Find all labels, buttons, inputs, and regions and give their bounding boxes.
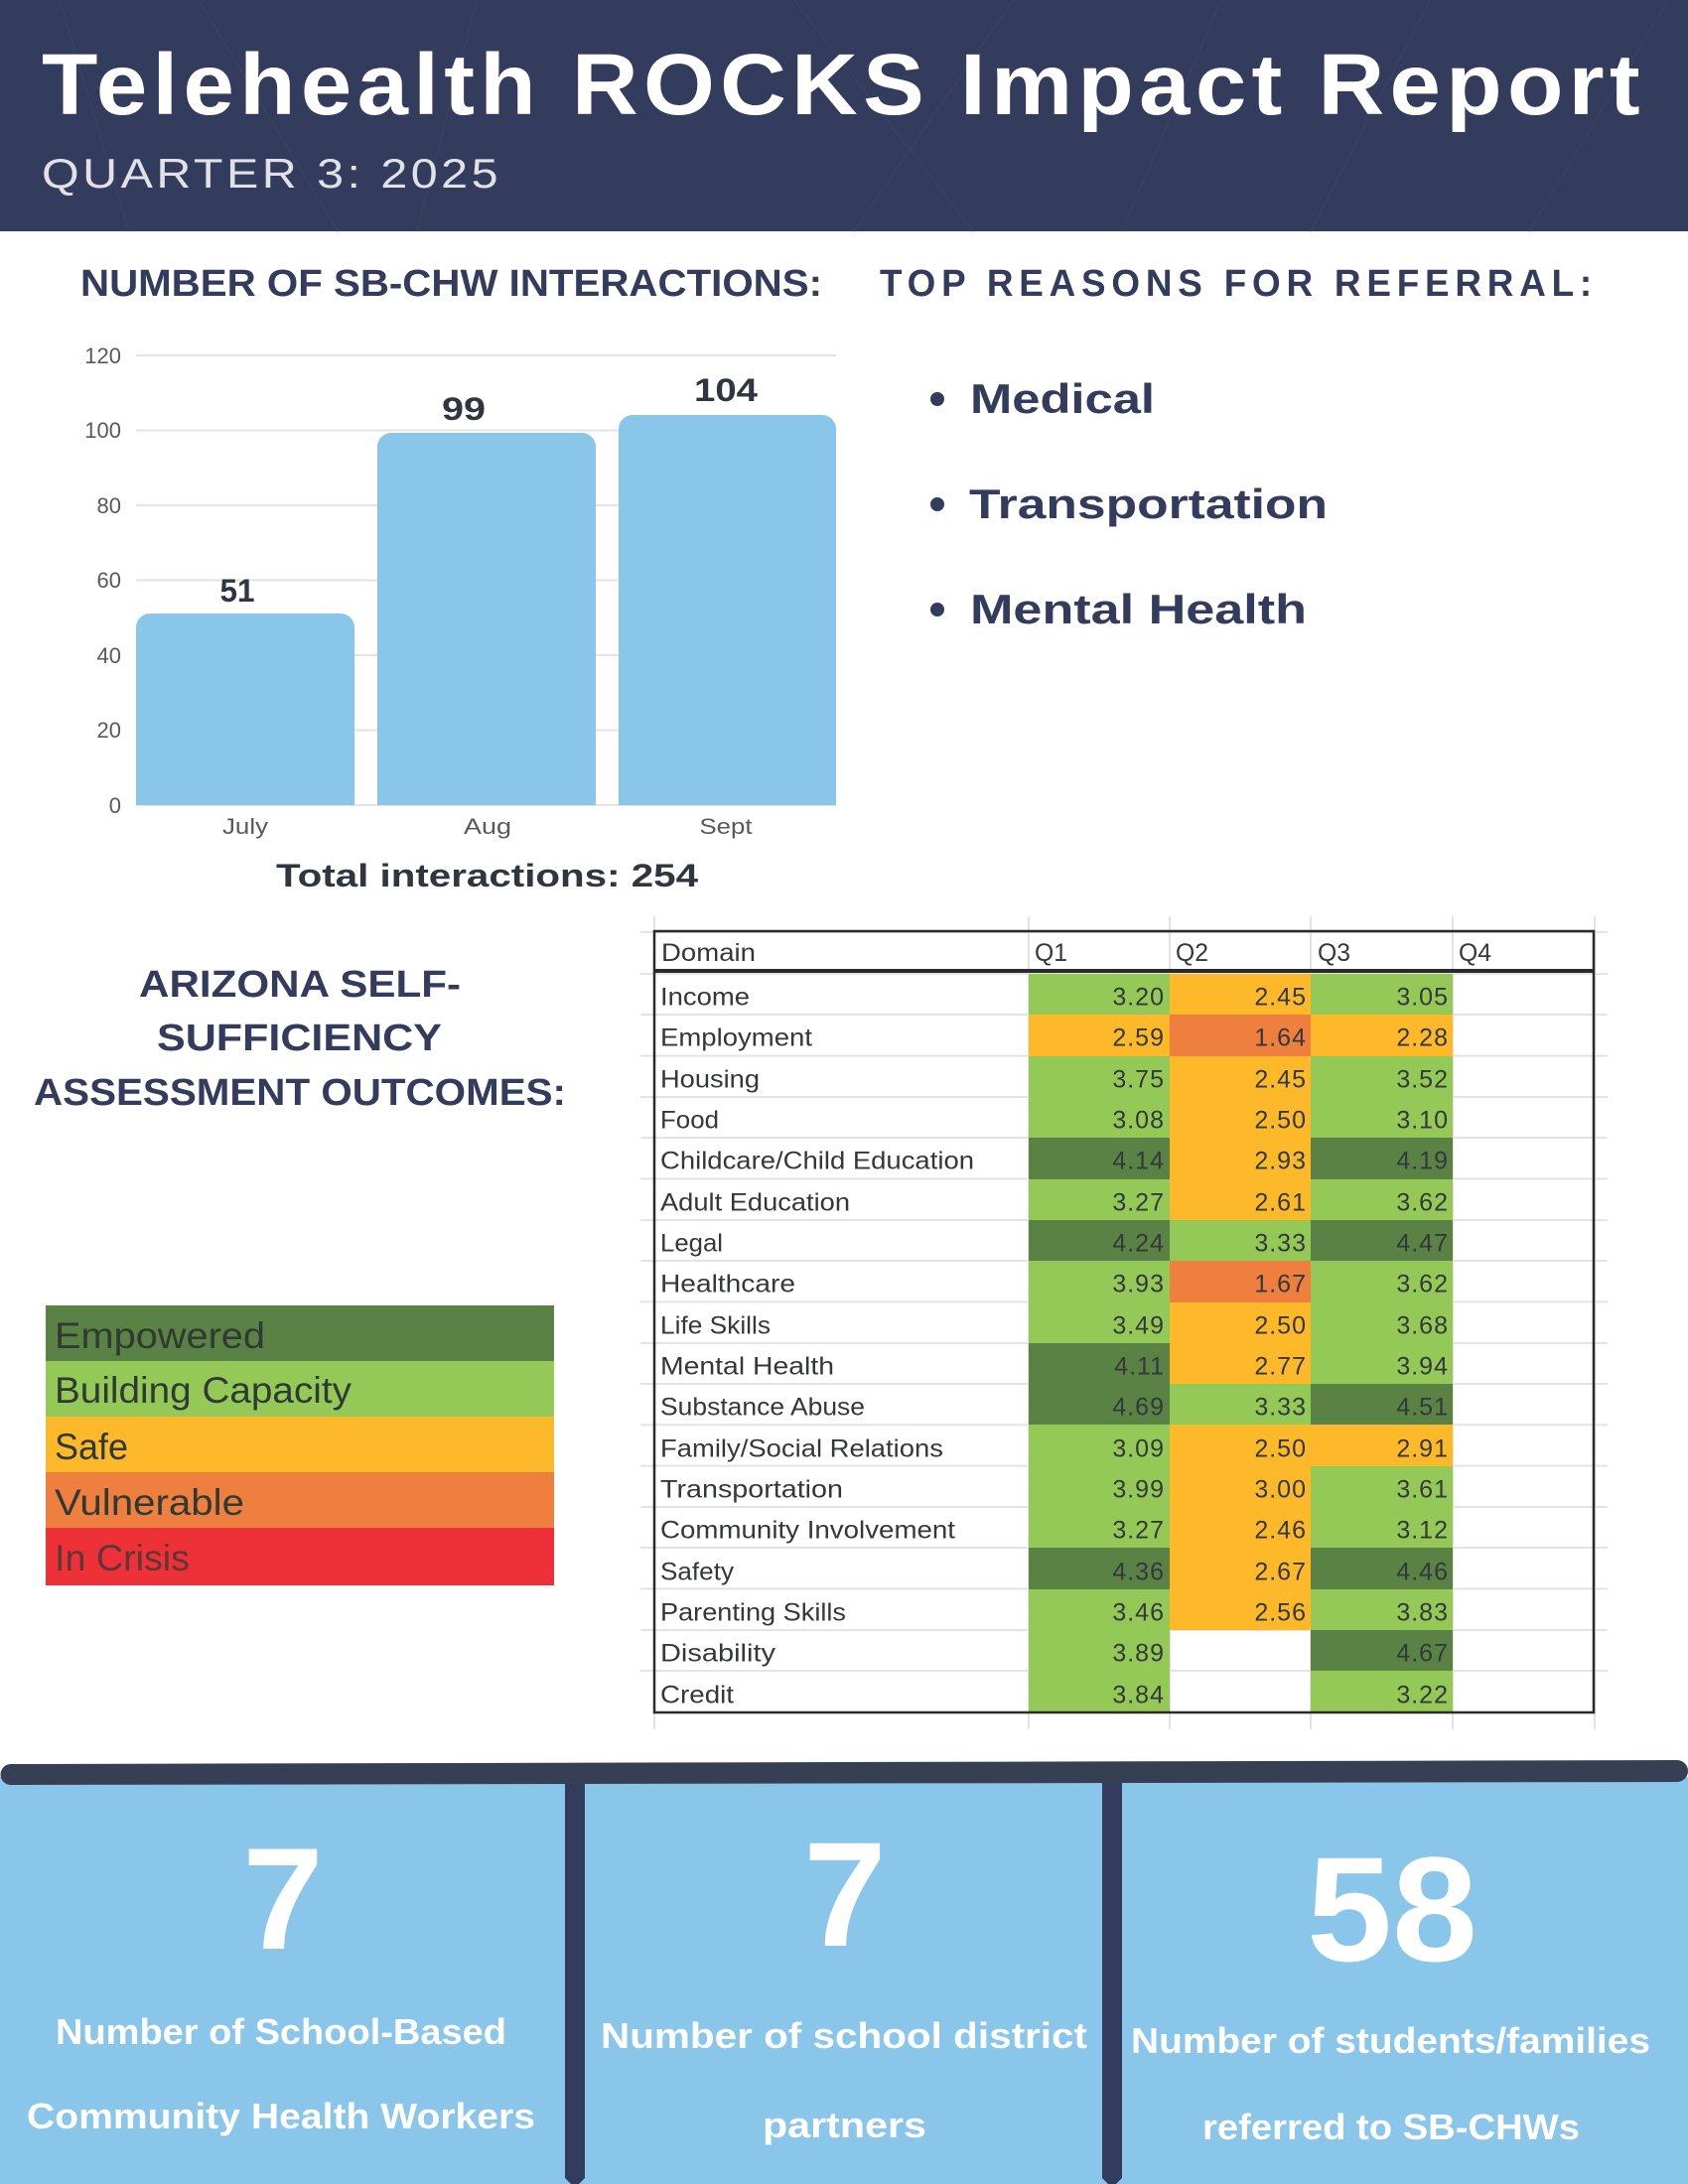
table domain labels: Adult Education [660, 1189, 850, 1217]
x axis labels: Sept [699, 814, 753, 839]
table domain labels: Healthcare [660, 1271, 795, 1298]
heading: Arizona self-sufficiency assessment outcomes [34, 964, 566, 1114]
Q1 scores: 3.89 [1112, 1640, 1165, 1668]
Q2 scores: 3.33 [1254, 1394, 1307, 1422]
legend: outcome levels: In Crisis [55, 1538, 190, 1578]
Q3 scores: 4.19 [1396, 1148, 1449, 1175]
table domain labels [660, 983, 974, 1709]
y axis labels: 20 [97, 718, 121, 743]
Q3 scores: 4.46 [1396, 1559, 1449, 1586]
bar: Sept [619, 415, 836, 805]
Q3 scores: 3.94 [1396, 1352, 1449, 1380]
bar values [220, 372, 758, 609]
header banner [0, 0, 1688, 231]
Q2 scores: 2.56 [1254, 1598, 1307, 1626]
legend: outcome levels: Safe [55, 1427, 128, 1467]
heading: Arizona self-sufficiency assessment outcomes: ASSESSMENT OUTCOMES: [34, 1072, 566, 1114]
x axis labels: Aug [464, 814, 511, 839]
panel: school-based community health workers: 7 [242, 1818, 324, 1979]
table domain labels: Substance Abuse [660, 1394, 865, 1422]
heading: number of interactions: NUMBER OF SB-CHW INTERACTIONS: [80, 263, 822, 305]
Q1 scores: 4.11 [1114, 1352, 1165, 1380]
panel: school district partners [601, 1811, 1087, 2145]
heat map cells [1029, 974, 1453, 1712]
divider: left [565, 1777, 585, 2184]
Q1 scores: 3.75 [1112, 1066, 1165, 1094]
heading: Arizona self-sufficiency assessment outcomes: ARIZONA SELF- [139, 964, 461, 1006]
Q1 scores: 3.20 [1112, 983, 1165, 1011]
table domain labels: Life Skills [660, 1312, 771, 1340]
Q1 scores: 3.99 [1112, 1475, 1165, 1503]
Q1 scores: 4.69 [1112, 1394, 1165, 1422]
panel: school-based community health workers: Community Health Workers [27, 2096, 535, 2136]
Q2 scores: 2.50 [1254, 1435, 1307, 1463]
Q1 scores [1112, 983, 1165, 1709]
Q3 scores: 4.67 [1396, 1640, 1449, 1668]
Q2 scores: 1.64 [1254, 1024, 1307, 1052]
heading: top reasons for referral: TOP REASONS FOR REFERRAL: [880, 263, 1598, 305]
panel: students and families referred: referred to SB-CHWs [1202, 2107, 1580, 2147]
table borders [654, 931, 1594, 1712]
heading: Arizona self-sufficiency assessment outcomes: SUFFICIENCY [157, 1018, 442, 1059]
Q1 scores: 3.08 [1112, 1106, 1165, 1134]
Q3 scores: 3.62 [1396, 1189, 1449, 1217]
legend: outcome levels: Empowered [55, 1315, 265, 1356]
Q3 scores: 4.51 [1396, 1394, 1449, 1422]
horizontal rule [1, 1760, 1688, 1785]
table domain labels: Employment [660, 1024, 812, 1052]
Q2 scores [1254, 983, 1307, 1626]
Q1 scores: 3.93 [1112, 1271, 1165, 1298]
y axis labels: 120 [84, 343, 121, 368]
Q1 scores: 3.27 [1112, 1189, 1165, 1217]
table domain labels: Parenting Skills [660, 1598, 846, 1626]
Q2 scores: 2.50 [1254, 1106, 1307, 1134]
panel: school district partners: partners [763, 2105, 926, 2145]
Q2 scores: 2.46 [1254, 1517, 1307, 1545]
Q3 scores: 3.05 [1396, 983, 1449, 1011]
panel: school-based community health workers: Number of School-Based [56, 2011, 506, 2052]
Q3 scores [1396, 983, 1449, 1709]
bar values: 51 [220, 573, 254, 609]
Q3 scores: 3.62 [1396, 1271, 1449, 1298]
list: top reasons: Transportation [969, 480, 1328, 527]
Q1 scores: 3.46 [1112, 1598, 1165, 1626]
Q2 scores: 2.50 [1254, 1312, 1307, 1340]
table domain labels: Disability [660, 1640, 776, 1668]
footer stats band [0, 1760, 1688, 2184]
table domain labels: Safety [660, 1559, 735, 1586]
panel: students and families referred: Number of students/families [1131, 2020, 1650, 2061]
y axis labels [84, 343, 121, 818]
panel: school district partners: 7 [803, 1811, 887, 1978]
Q1 scores: 3.27 [1112, 1517, 1165, 1545]
panel: school district partners: Number of school district [601, 2015, 1087, 2056]
table header row: Q1 [1035, 939, 1067, 967]
Q1 scores: 4.36 [1112, 1559, 1165, 1586]
Q3 scores: 4.47 [1396, 1229, 1449, 1257]
table domain labels: Transportation [660, 1475, 843, 1503]
y axis labels: 40 [97, 643, 121, 668]
bar values: 104 [694, 372, 758, 408]
legend: outcome levels [46, 1305, 554, 1585]
table domain labels: Mental Health [660, 1352, 834, 1380]
Q1 scores: 3.84 [1112, 1682, 1165, 1709]
y axis labels: 0 [109, 793, 121, 818]
table: domain scores by quarter [640, 916, 1608, 1729]
bar chart: SB-CHW interactions by month [84, 343, 836, 839]
Q2 scores: 2.45 [1254, 983, 1307, 1011]
Q2 scores: 2.45 [1254, 1066, 1307, 1094]
table domain labels: Childcare/Child Education [660, 1148, 974, 1175]
table domain labels: Credit [660, 1682, 734, 1709]
list: top reasons: Medical [970, 375, 1155, 422]
table domain labels: Legal [660, 1229, 723, 1257]
Q3 scores: 3.68 [1396, 1312, 1449, 1340]
y axis labels: 100 [84, 418, 121, 443]
bar: Aug [377, 433, 596, 805]
x axis labels: July [222, 814, 268, 839]
Q1 scores: 4.14 [1112, 1148, 1165, 1175]
divider: right [1102, 1777, 1122, 2184]
panel: school-based community health workers [27, 1818, 535, 2136]
table domain labels: Family/Social Relations [660, 1435, 943, 1463]
Q3 scores: 2.28 [1396, 1024, 1449, 1052]
bar: July [136, 614, 354, 805]
Q2 scores: 3.00 [1254, 1475, 1307, 1503]
subtitle: QUARTER 3: 2025 [42, 150, 501, 197]
table header row [661, 939, 1491, 967]
Q3 scores: 3.10 [1396, 1106, 1449, 1134]
table domain labels: Community Involvement [660, 1517, 955, 1545]
table domain labels: Food [660, 1106, 719, 1134]
Q2 scores: 2.61 [1254, 1189, 1307, 1217]
Q3 scores: 3.12 [1396, 1517, 1449, 1545]
bar values: 99 [442, 391, 486, 427]
Q2 scores: 1.67 [1254, 1271, 1307, 1298]
Q3 scores: 3.83 [1396, 1598, 1449, 1626]
Q3 scores: 3.22 [1396, 1682, 1449, 1709]
table header row: Q4 [1459, 939, 1491, 967]
legend: outcome levels: Vulnerable [55, 1482, 244, 1523]
Q1 scores: 3.49 [1112, 1312, 1165, 1340]
table domain labels: Housing [660, 1066, 760, 1094]
total interactions: Total interactions: 254 [276, 858, 698, 893]
title: Telehealth ROCKS Impact Report [42, 37, 1645, 133]
table header row: Q2 [1176, 939, 1208, 967]
Q1 scores: 4.24 [1112, 1229, 1165, 1257]
list: top reasons: Mental Health [970, 586, 1307, 632]
panel: students and families referred: 58 [1307, 1826, 1477, 1992]
Q3 scores: 3.52 [1396, 1066, 1449, 1094]
Q1 scores: 2.59 [1112, 1024, 1165, 1052]
Q2 scores: 2.77 [1254, 1352, 1307, 1380]
table domain labels: Income [660, 983, 750, 1011]
Q1 scores: 3.09 [1112, 1435, 1165, 1463]
Q2 scores: 2.67 [1254, 1559, 1307, 1586]
list: top reasons [930, 375, 1328, 632]
panel: students and families referred [1131, 1826, 1650, 2147]
x axis labels [222, 814, 753, 839]
y axis labels: 60 [97, 568, 121, 593]
table header row: Domain [661, 939, 756, 967]
table header row: Q3 [1318, 939, 1350, 967]
Q3 scores: 2.91 [1396, 1435, 1449, 1463]
legend: outcome levels: Building Capacity [55, 1370, 352, 1411]
Q3 scores: 3.61 [1396, 1475, 1449, 1503]
Q2 scores: 3.33 [1254, 1229, 1307, 1257]
Q2 scores: 2.93 [1254, 1148, 1307, 1175]
y axis labels: 80 [97, 493, 121, 518]
